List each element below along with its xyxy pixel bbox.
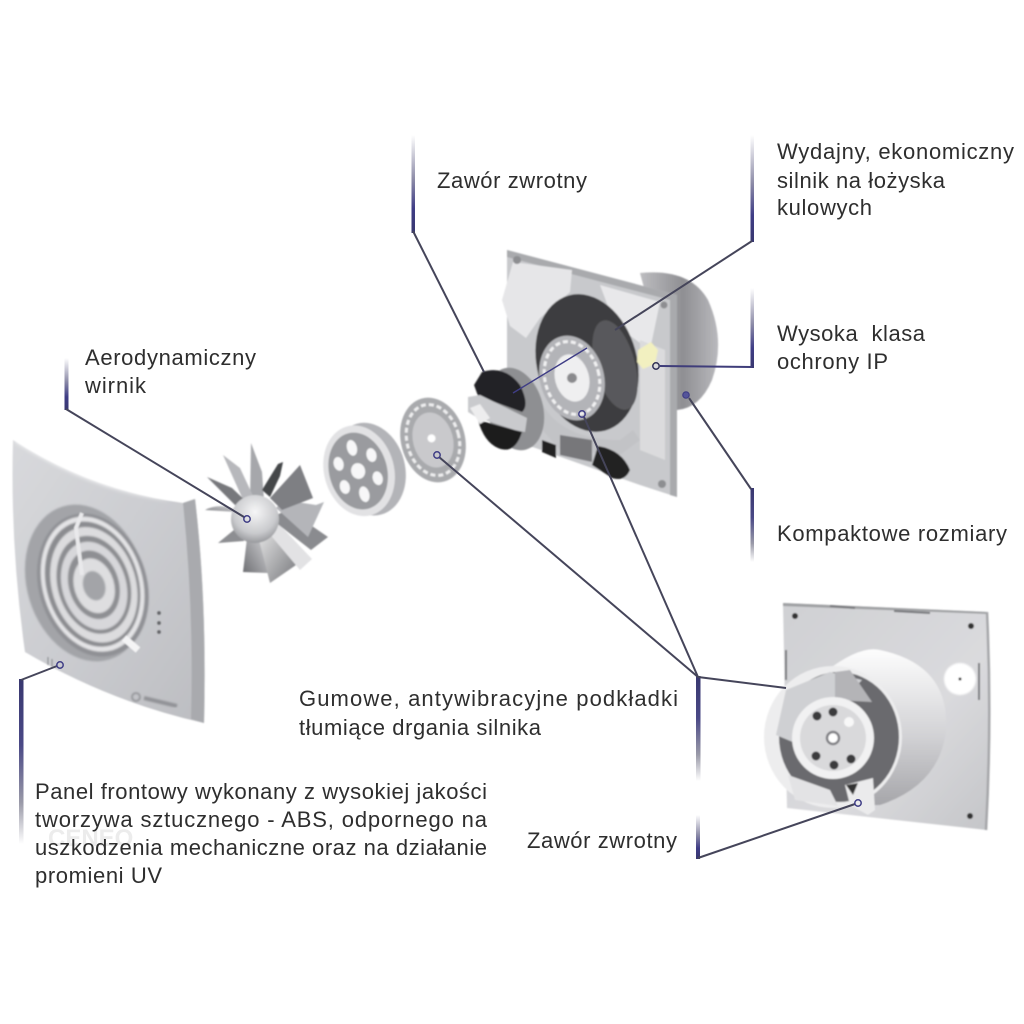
leader: Zawor zwrotny top (412, 135, 484, 372)
bottom connector (560, 435, 592, 462)
label: wirnik: wirnik (84, 373, 147, 398)
label: podkladki: tłumiące drgania silnika (299, 715, 542, 740)
illustration: vented hub ring (313, 414, 416, 526)
label: panel frontowy: Panel frontowy wykonany z wysokiej jakości (35, 779, 487, 804)
illustration: front panel (6, 436, 205, 723)
leader: zawor dolny (696, 800, 861, 859)
illustration: rubber damper disc (391, 390, 475, 490)
white spot (944, 663, 976, 695)
logo (132, 693, 177, 706)
label: podkladki (299, 686, 678, 740)
leader: podkladki (434, 411, 786, 781)
screws (792, 613, 974, 819)
label: panel frontowy: uszkodzenia mechaniczne oraz na działanie (35, 835, 487, 860)
label: podkladki: Gumowe, antywibracyjne podkładki (299, 686, 678, 711)
illustration: motor (468, 361, 553, 457)
label: wirnik (84, 345, 256, 398)
watermark: CENEO (48, 825, 133, 852)
yellow sealed patch (637, 342, 658, 369)
leader: wirnik (64, 358, 250, 522)
leader: panel (19, 662, 63, 844)
illustration: housing back plate exploded view (502, 250, 718, 497)
label: Zawor zwrotny bottom: Zawór zwrotny (527, 828, 677, 853)
motor wheel (530, 328, 614, 428)
label: silnik: silnik na łożyska (777, 168, 946, 193)
label: wirnik: Aerodynamiczny (85, 345, 256, 370)
hub (792, 697, 874, 779)
label: panel frontowy (35, 779, 488, 888)
illustration: assembled fan, rear view (764, 603, 990, 830)
label: Zawor zwrotny top: Zawór zwrotny (437, 168, 587, 193)
label: ochrona IP (777, 321, 926, 374)
label: silnik: kulowych (777, 195, 872, 220)
illustration: impeller (205, 443, 328, 583)
grille (6, 489, 167, 677)
leader: silnik (513, 135, 754, 393)
label: ochrona IP: Wysoka klasa (777, 321, 926, 346)
valve flap (845, 778, 875, 815)
leader lines (19, 135, 861, 859)
label: ochrona IP: ochrony IP (777, 349, 888, 374)
three indicator dots (157, 611, 161, 634)
label: rozmiary: Kompaktowe rozmiary (777, 521, 1007, 546)
label: panel frontowy: tworzywa sztucznego - ABS, odpornego na (35, 807, 488, 832)
label: panel frontowy: promieni UV (35, 863, 162, 888)
duct (825, 649, 946, 806)
leader: rozmiary (683, 392, 754, 562)
label: silnik (777, 139, 1014, 220)
leader: ochrona IP (653, 288, 754, 369)
label: silnik: Wydajny, ekonomiczny (777, 139, 1014, 164)
screws (513, 256, 668, 488)
